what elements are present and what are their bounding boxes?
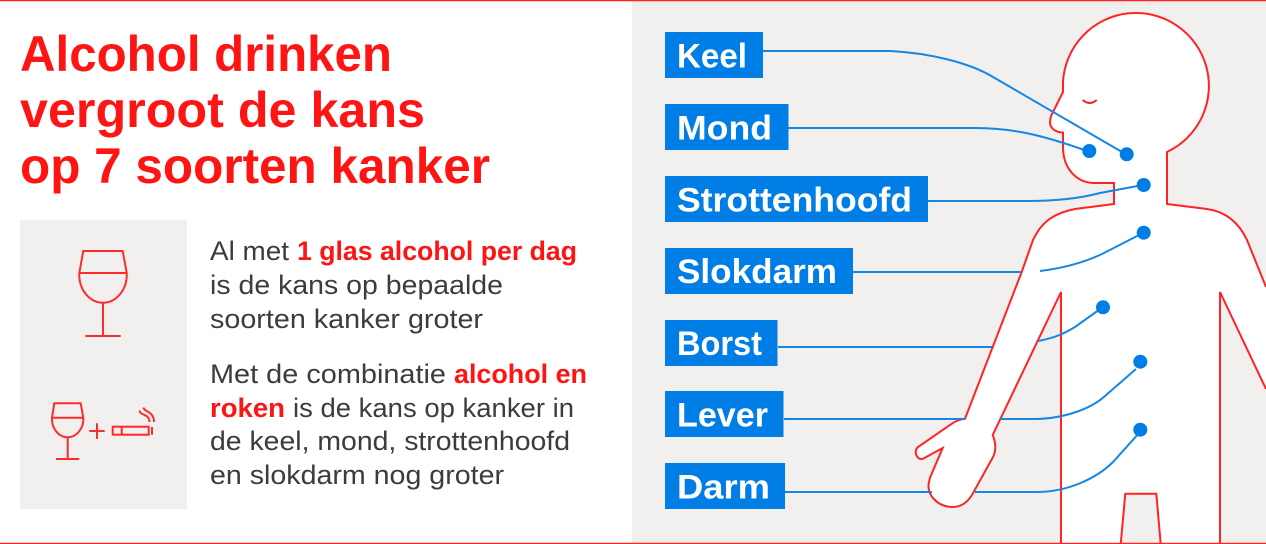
text block: alcohol and smoking: Met de combinatie [210, 359, 446, 389]
text block: one glass [210, 236, 577, 334]
text block: alcohol and smoking [210, 359, 587, 490]
label: Mond [665, 104, 788, 150]
title: Alcohol drinken [20, 26, 392, 82]
icon: wine glass plus cigarette [52, 403, 154, 459]
label: Borst: Borst [677, 325, 762, 363]
connector: Darm [785, 423, 1147, 492]
title: op 7 soorten kanker [20, 138, 490, 194]
text block: one glass: is de kans op bepaalde [210, 270, 503, 300]
label: Slokdarm [665, 248, 853, 294]
connector: Lever [784, 355, 1147, 419]
body outline figure [916, 13, 1266, 544]
text block: alcohol and smoking: alcohol en [454, 359, 587, 389]
panel: icons [20, 220, 187, 509]
text block: one glass: 1 glas alcohol per dag [297, 236, 577, 266]
text block: alcohol and smoking: is de kans op kanker in [293, 393, 574, 423]
connector: Slokdarm [853, 226, 1151, 272]
label: Keel [665, 32, 763, 78]
text block: one glass: soorten kanker groter [210, 304, 483, 334]
gap between the legs [1121, 494, 1161, 544]
label: Strottenhoofd: Strottenhoofd [677, 182, 912, 220]
connector: Borst [778, 300, 1110, 347]
title: vergroot de kans [20, 82, 425, 138]
label: Darm [665, 463, 785, 509]
label: Slokdarm: Slokdarm [677, 253, 837, 291]
panel: body diagram background [632, 0, 1266, 544]
text block: alcohol and smoking: de keel, mond, strottenhoofd [210, 426, 570, 456]
text block: alcohol and smoking: en slokdarm nog groter [210, 460, 504, 490]
label: Darm: Darm [677, 468, 770, 506]
connector: Mond [788, 128, 1096, 158]
label: Borst [665, 320, 778, 366]
label: Keel: Keel [677, 38, 747, 76]
icon: closed eye [1083, 100, 1097, 103]
connector: Keel [763, 51, 1134, 161]
title [20, 26, 490, 194]
label: Lever [665, 391, 784, 437]
connector: Strottenhoofd [928, 178, 1151, 201]
text block: one glass: Al met [210, 236, 290, 266]
icon: wine glass [79, 251, 127, 336]
text block: alcohol and smoking: roken [210, 393, 285, 423]
label: Mond: Mond [677, 110, 772, 148]
label: Lever: Lever [677, 396, 768, 434]
